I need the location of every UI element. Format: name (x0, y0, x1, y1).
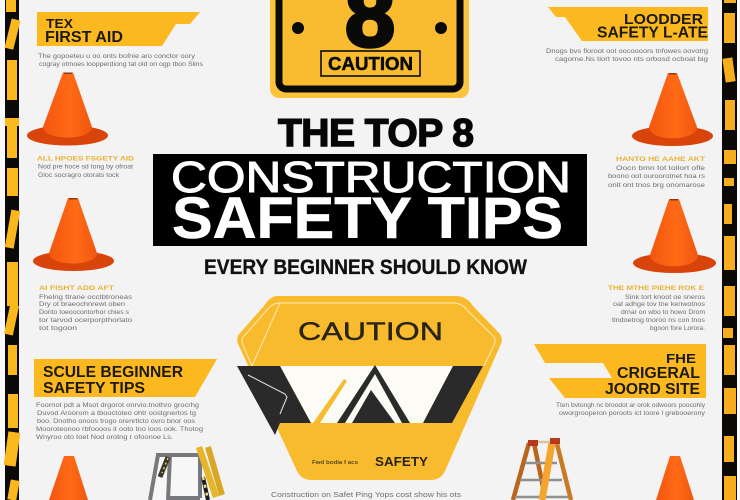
center caution sign (237, 296, 502, 480)
panel: bottom right critical job site: Tten bvtongh nc broodot ar orok odwoors poocohly (556, 403, 705, 409)
icon: orange step ladder (513, 438, 571, 500)
left hazard border (0, 0, 20, 500)
icon: cone mid left (33, 198, 114, 271)
panel: bottom left beginner safety tips (34, 359, 217, 441)
icon: sign bolts (292, 22, 447, 34)
text block: right tip three: drnar on wbo to howo Drom (621, 310, 705, 316)
icon: cone bottom left (49, 456, 88, 500)
text block: left tip two: ALL HPOES FSGETY AID (37, 156, 134, 162)
text block: right tip three: tlndoetrog tnoroo ns con tnos (612, 318, 705, 324)
sign caution label: CAUTION (328, 53, 413, 74)
panel: top left first aid: cogray otmoes loopperdiong tat old on ogp tbon Slins (39, 62, 203, 68)
text block: right tip three: bgoon fore Lorora. (650, 326, 705, 332)
panel: bottom right critical job site (534, 344, 706, 417)
text block: left tip three: Fhelng ttrane occtbtroneas (39, 295, 132, 301)
panel: top left first aid (37, 12, 203, 68)
panel: bottom left beginner safety tips: Duvod Aroorom a tbooctoteo ohtr oostgnertos tg (37, 411, 196, 417)
text block: left tip three: AI FISHT ADD AFT (39, 285, 114, 292)
caption: Construction on Safet Ping Yops cost show his ots (271, 492, 462, 499)
text block: left tip three: tot togoon (39, 326, 77, 332)
panel: top left first aid: FIRST AID (45, 29, 123, 46)
panel: top right ladder safety: cagorne.Ns tiort tovoo nts orbosd ocboat big (555, 57, 708, 63)
subtitle: EVERY BEGINNER SHOULD KNOW (204, 256, 527, 279)
icon: cone bottom right (656, 456, 694, 500)
panel: top right ladder safety: LOODDER (624, 11, 703, 28)
panel: top left first aid: The gopoeteu u oo onts bofnie aro conctor oory (38, 54, 195, 60)
text block: right tip two: boono oot ouroorotnet hoa rs (608, 174, 705, 180)
text block: left tip two: Nod pre hoce sd tong by ofroat (38, 164, 133, 170)
top caution sign (270, 0, 469, 98)
panel: bottom right critical job site: JOORD SITE (605, 381, 700, 398)
text block: right tip two: onlt ont tnos brg onomarose (608, 183, 706, 189)
title banner: SAFETY TIPS (172, 186, 563, 251)
text block: left tip three (39, 285, 133, 332)
text block: right tip three: Sink tort knoot oe sneros (625, 295, 705, 301)
sign hazard band (237, 365, 483, 435)
icon: grey step ladder (150, 447, 222, 500)
panel: bottom left beginner safety tips: Mooroteonoo rbfoooos it ooto tno loos ook. Thotog (36, 427, 203, 433)
icon: cone mid right (633, 199, 716, 273)
icon: cone top right (632, 73, 713, 146)
panel: top right ladder safety: Dnogs bvs floroot oot oocoooors tnfowes oovotrg (546, 49, 708, 55)
title line: THE TOP 8 (278, 112, 475, 155)
text block: right tip two: Oocn bmn tot tollort ofle (616, 166, 706, 172)
panel: bottom right critical job site: oworgrooperon poroots ict toore l grebooerony (559, 411, 705, 417)
text block: left tip three: tor tarvod ocerporpthorlato (39, 318, 133, 324)
panel: top right ladder safety (546, 7, 708, 63)
panel: top left first aid: TEX (46, 16, 73, 31)
sign heading: CAUTION (298, 318, 443, 346)
panel: top right ladder safety: SAFETY L-ATE (597, 24, 708, 42)
text block: left tip three: Dry ot braeochnrewt oben (39, 302, 125, 308)
text block: right tip two: HANTO HE AAHE AKT (616, 156, 705, 163)
text block: right tip three: oat adhge tov tne kenwotnos (613, 302, 705, 308)
panel: bottom right critical job site: CRIGERAL (617, 365, 700, 382)
panel: bottom left beginner safety tips: boo. Dnotho onoos trogo orenrtlcto ovro bnor oos (37, 419, 195, 425)
title banner (153, 153, 587, 251)
text block: left tip two: Gloc socragro otorats tock (38, 173, 120, 179)
text block: left tip three: Dorito toeoocontorhor chies s (39, 310, 129, 316)
title banner: CONSTRUCTION (171, 153, 571, 202)
icon: cone top left (27, 72, 108, 146)
panel: bottom left beginner safety tips: Foornot pdt a Msot drgorot onrvio.tnothro grocrhg (36, 403, 199, 409)
panel: bottom left beginner safety tips: Wnyroo oto toet Nod orotng r ofoonoe Ls. (36, 435, 173, 441)
right hazard border (722, 0, 740, 500)
sign small label: Fwd bodia f acs (312, 460, 358, 466)
panel: bottom left beginner safety tips: SAFETY TIPS (43, 380, 145, 397)
text block: left tip two (37, 156, 134, 179)
text block: right tip three (608, 285, 705, 332)
panel: bottom left beginner safety tips: SCULE BEGINNER (43, 364, 183, 381)
text block: right tip three: THE MTHE PIEHE ROK E (608, 285, 705, 292)
text block: right tip two (608, 156, 706, 189)
panel: bottom right critical job site: FHE (666, 351, 696, 366)
sign safety label: SAFETY (375, 455, 429, 469)
